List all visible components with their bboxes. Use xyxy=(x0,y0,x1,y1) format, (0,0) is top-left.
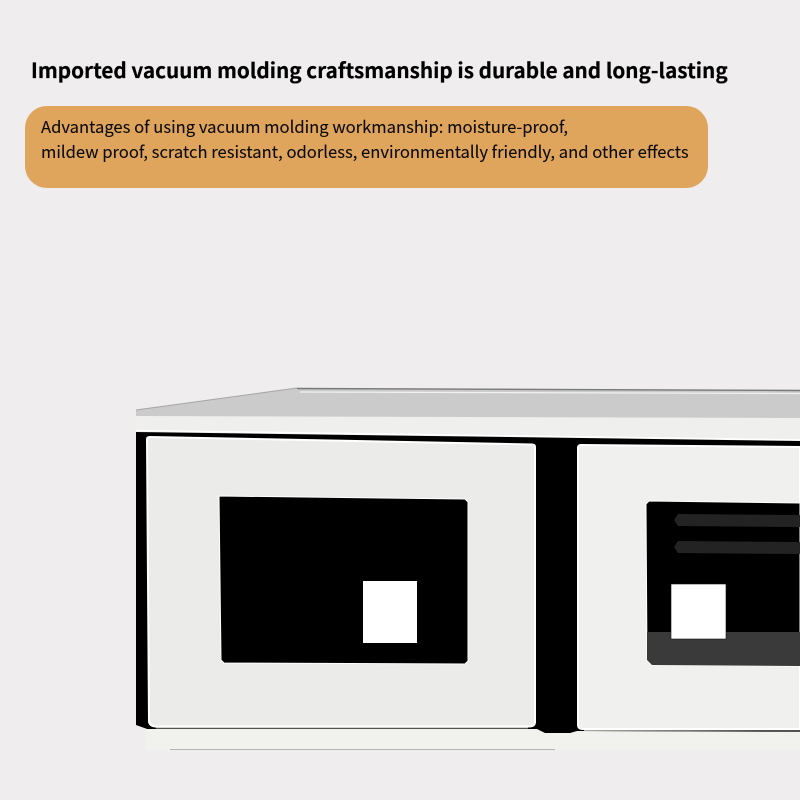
cabinet top front edge xyxy=(136,416,800,441)
lower grey panel in window xyxy=(647,632,800,666)
right drawer front xyxy=(578,445,800,731)
shelf bars in window xyxy=(674,514,800,554)
left drawer front xyxy=(147,437,535,728)
left drawer window xyxy=(219,496,468,664)
cabinet black body xyxy=(136,432,800,733)
callout text xyxy=(41,114,689,163)
right drawer handle xyxy=(671,584,726,639)
cabinet bottom rail xyxy=(145,729,800,750)
right drawer window xyxy=(646,501,800,666)
cabinet top surface xyxy=(136,388,800,418)
callout text: mildew proof, scratch resistant, odorless, environmentally friendly, and other effects xyxy=(41,139,689,163)
title: Imported vacuum molding craftsmanship is durable and long-lasting xyxy=(31,54,728,84)
callout text: Advantages of using vacuum molding workmanship: moisture-proof, xyxy=(41,114,568,138)
left drawer handle xyxy=(363,581,417,643)
callout: advantages xyxy=(25,106,708,188)
